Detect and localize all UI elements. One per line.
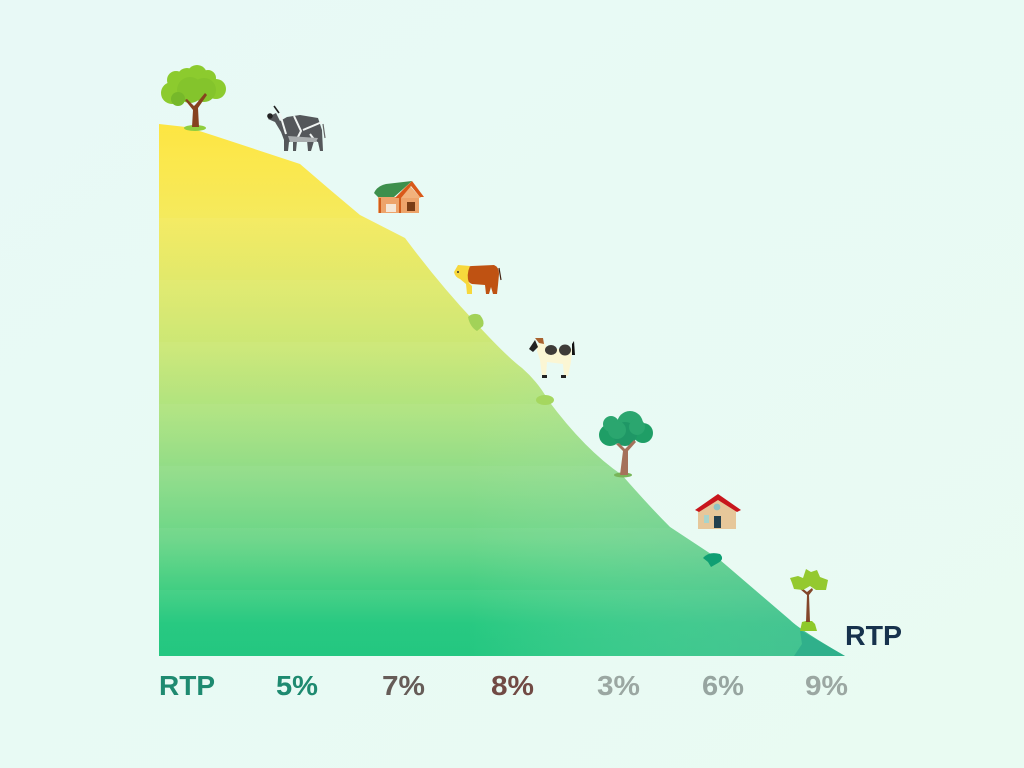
- bush on slope: [468, 314, 484, 331]
- icon: orange cow: [454, 265, 501, 294]
- icon: large green tree: [161, 65, 226, 131]
- bush on slope: [703, 553, 722, 567]
- icon: young tree: [790, 569, 828, 631]
- icon: wooden hut: [374, 181, 424, 213]
- axis value: 7%: 7%: [382, 670, 425, 701]
- icon: zebra: [267, 106, 325, 151]
- axis value: 5%: 5%: [276, 670, 318, 701]
- label: RTP at slope end: RTP: [845, 620, 902, 651]
- axis value: 8%: 8%: [491, 670, 534, 701]
- icon: red roof house: [695, 494, 741, 529]
- icon: dark green tree: [599, 411, 653, 478]
- bush on slope: [536, 395, 554, 405]
- axis value: 9%: 9%: [805, 670, 848, 701]
- axis value: 3%: 3%: [597, 670, 640, 701]
- axis label: RTP: RTP: [159, 670, 215, 701]
- icon: spotted cow: [529, 338, 575, 378]
- slope area chart: [159, 124, 845, 656]
- axis value: 6%: 6%: [702, 670, 744, 701]
